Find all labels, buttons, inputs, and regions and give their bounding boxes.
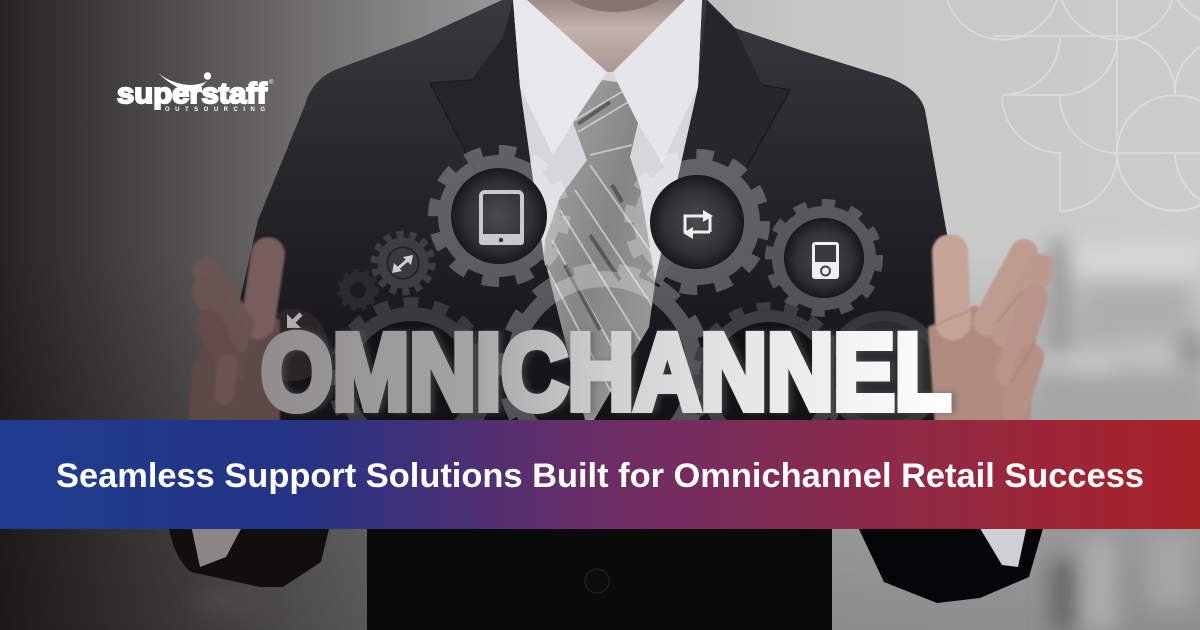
gear: lower left (333, 302, 489, 458)
icon: repeat arrows (683, 210, 713, 239)
logo dot (204, 72, 211, 80)
right shirt cuff (978, 525, 1027, 567)
icon: media player (812, 242, 839, 279)
gear: large center (502, 268, 706, 472)
decorative line pattern top right (947, 0, 1200, 211)
gear: far right (828, 316, 940, 428)
jacket lapels (430, 0, 790, 285)
gear hub with arrow (256, 309, 328, 381)
logo registered mark: ® (269, 79, 274, 86)
right collar (613, 0, 702, 163)
icon: arrow (287, 314, 301, 328)
logo wordmark: superstaff (117, 78, 267, 110)
banner heading: Seamless Support Solutions Built for Omnichannel Retail Success (56, 457, 1144, 495)
right sleeve (857, 525, 1044, 603)
logo: superstaff outsourcing (117, 72, 274, 113)
suit jacket (235, 0, 948, 425)
gear: repeat (630, 155, 764, 289)
logo swoosh (158, 73, 207, 92)
shirt and collar (513, 0, 702, 300)
left sleeve (168, 525, 330, 587)
title banner (0, 420, 1200, 529)
left shirt cuff (191, 525, 243, 567)
gear: lower right (695, 306, 843, 454)
gear: small expand (374, 234, 432, 292)
word: OMNICHANNEL: OMNICHANNEL (261, 311, 951, 432)
logo tagline: OUTSOURCING (165, 107, 265, 113)
icon: tablet (479, 192, 524, 245)
lower torso (367, 525, 832, 630)
chin shadow (570, 0, 660, 12)
icon: expand arrows (392, 255, 413, 273)
suit button (585, 569, 609, 593)
gear: tablet (434, 151, 564, 281)
neck (527, 0, 685, 72)
gear: media player (770, 204, 878, 312)
left collar (513, 0, 607, 155)
gear: tiny (340, 272, 376, 308)
necktie (544, 80, 660, 420)
left hand (188, 254, 280, 425)
right hand (928, 252, 1041, 425)
